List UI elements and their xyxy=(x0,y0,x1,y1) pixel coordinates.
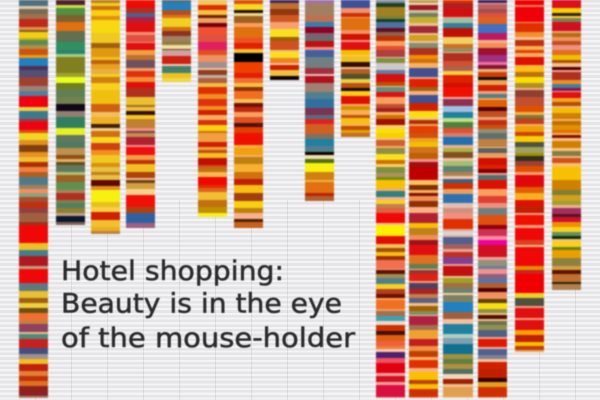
stripe column 10 xyxy=(341,0,370,137)
stripe column 9 xyxy=(305,0,334,201)
stripe column 14 xyxy=(478,0,507,398)
title text block: Hotel shopping: xyxy=(61,256,284,287)
stripe column 3 xyxy=(91,0,120,234)
title text block: of the mouse-holder xyxy=(61,323,356,354)
stripe column 6 xyxy=(198,0,227,217)
stripe column 11 xyxy=(376,0,405,398)
stripe column 8 xyxy=(270,0,299,80)
stripe column 2 xyxy=(56,0,85,225)
stripe column 5 xyxy=(162,0,191,82)
stripe column 15 xyxy=(515,0,544,352)
stripe column 1 xyxy=(19,0,48,398)
stripe column 13 xyxy=(443,0,473,398)
stripe column 7 xyxy=(234,0,263,228)
title text block: Beauty is in the eye xyxy=(61,288,342,320)
stripe column 16 xyxy=(552,0,581,290)
stripe column 12 xyxy=(409,0,438,398)
stripe column 4 xyxy=(126,0,155,228)
